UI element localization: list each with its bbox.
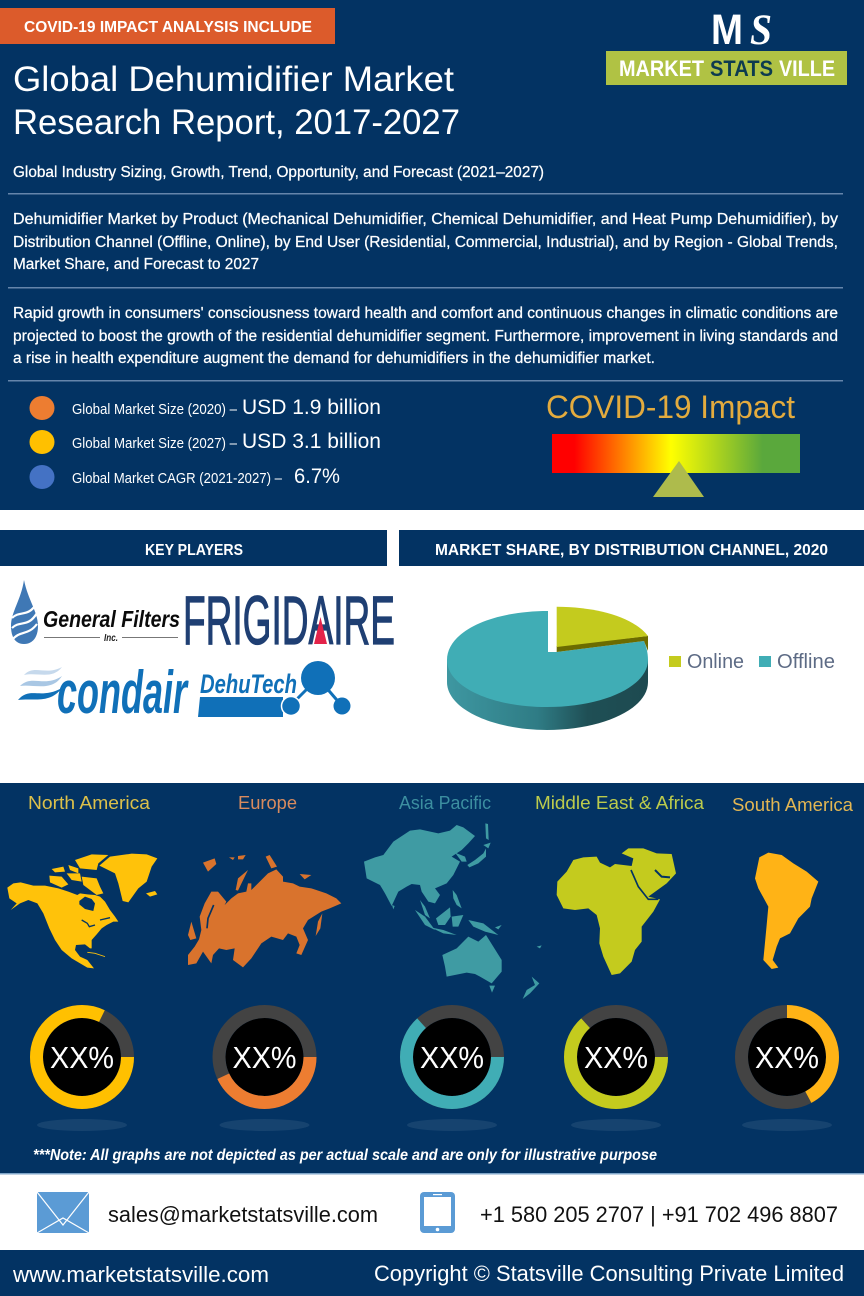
footer: copyright: Copyright © Statsville Consulting Private Limited bbox=[374, 1261, 844, 1286]
donut: North America bbox=[36, 1012, 128, 1131]
stat: market cagr bbox=[30, 465, 340, 489]
donut: Middle East and Africa: XX% bbox=[584, 1040, 648, 1075]
icon: email envelope bbox=[37, 1192, 89, 1233]
donut: North America: XX% bbox=[50, 1040, 114, 1075]
map: Europe bbox=[188, 855, 341, 967]
logo: Condair: condair bbox=[57, 659, 189, 726]
footer: website: www.marketstatsville.com bbox=[12, 1262, 269, 1287]
logo: Market Stats Ville: M bbox=[711, 6, 743, 54]
title bbox=[13, 60, 460, 142]
logo: Market Stats Ville: STATS bbox=[710, 56, 773, 81]
donut: Asia Pacific bbox=[406, 1012, 498, 1131]
label: Europe: Europe bbox=[238, 792, 297, 813]
donut: Asia Pacific: XX% bbox=[420, 1040, 484, 1075]
contact: phone numbers: +1 580 205 2707 | +91 702 496 8807 bbox=[480, 1202, 838, 1227]
contact: email: sales@marketstatsville.com bbox=[108, 1202, 378, 1227]
footnote: ***Note: All graphs are not depicted as per actual scale and are only for illustrative purpose bbox=[33, 1147, 657, 1164]
icon: phone bbox=[420, 1192, 455, 1233]
stat: market size 2027: Global Market Size (2027) – bbox=[72, 435, 238, 452]
donut: South America bbox=[742, 1012, 832, 1131]
subtitle: Global Industry Sizing, Growth, Trend, Opportunity, and Forecast (2021–2027) bbox=[13, 164, 544, 181]
stat: market size 2020 bbox=[30, 396, 381, 420]
text block: market drivers: projected to boost the growth of the residential dehumidifier segment. Furthermore, improvement in living standards and bbox=[13, 328, 838, 345]
stat: market size 2027: USD 3.1 billion bbox=[242, 430, 381, 453]
map: Asia Pacific bbox=[364, 823, 542, 999]
stat: market size 2020: Global Market Size (2020) – bbox=[72, 401, 238, 418]
badge: covid-19 impact analysis bbox=[0, 8, 335, 44]
text block: market segmentation: Dehumidifier Market by Product (Mechanical Dehumidifier, Chemical Dehumidifier, and Heat Pump Dehumidifier), by bbox=[13, 211, 838, 228]
header: key players: KEY PLAYERS bbox=[145, 542, 243, 559]
header: market share: MARKET SHARE, BY DISTRIBUTION CHANNEL, 2020 bbox=[435, 542, 828, 559]
logo: Market Stats Ville: VILLE bbox=[779, 56, 835, 81]
donut: South America: XX% bbox=[755, 1040, 819, 1075]
text block: market drivers: a rise in health expenditure augment the demand for dehumidifiers in the dehumidifier market. bbox=[13, 350, 655, 367]
map: South America bbox=[755, 853, 818, 969]
stat: market cagr: Global Market CAGR (2021-2027) – bbox=[72, 470, 283, 487]
stat: market size 2020: USD 1.9 billion bbox=[242, 396, 381, 419]
logo: Market Stats Ville: MARKET bbox=[619, 56, 705, 81]
heading: covid-19 impact: COVID-19 Impact bbox=[546, 389, 795, 425]
logo: Market Stats Ville: S bbox=[750, 7, 772, 54]
donut: Middle East and Africa bbox=[570, 1012, 662, 1131]
label: South America: South America bbox=[732, 794, 854, 815]
title: Global Dehumidifier Market bbox=[13, 60, 454, 99]
donut: Europe: XX% bbox=[232, 1040, 296, 1075]
logo: General Filters: General Filters bbox=[43, 606, 180, 632]
pie slice: online bbox=[557, 607, 648, 652]
label: Asia Pacific: Asia Pacific bbox=[399, 792, 491, 813]
header: key players bbox=[0, 530, 387, 566]
legend: offline: Offline bbox=[777, 651, 835, 673]
text block: market segmentation: Market Share, and Forecast to 2027 bbox=[13, 256, 259, 273]
header: market share bbox=[399, 530, 864, 566]
label: Middle East and Africa: Middle East & Africa bbox=[535, 792, 705, 813]
title: Research Report, 2017-2027 bbox=[13, 103, 460, 142]
logo: General Filters: Inc. bbox=[104, 633, 118, 644]
label: North America: North America bbox=[28, 792, 151, 813]
map: Middle East and Africa bbox=[557, 848, 676, 975]
stat: market cagr: 6.7% bbox=[294, 465, 340, 488]
logo: DehuTech bbox=[198, 661, 350, 717]
pie slice: offline bbox=[447, 611, 648, 707]
text block: market drivers bbox=[13, 305, 838, 367]
text block: market segmentation bbox=[13, 211, 838, 273]
logo: Frigidaire bbox=[183, 582, 395, 659]
badge: covid-19 impact analysis: COVID-19 IMPACT ANALYSIS INCLUDE bbox=[24, 19, 312, 36]
logo: Market Stats Ville bbox=[606, 6, 847, 85]
logo: DehuTech: DehuTech bbox=[200, 669, 297, 699]
gauge: covid-19 impact bbox=[552, 434, 800, 497]
pie chart: distribution channel bbox=[447, 607, 648, 730]
legend: online: Online bbox=[687, 651, 744, 673]
stat: market size 2027 bbox=[30, 430, 381, 454]
map: North America bbox=[7, 854, 157, 968]
donut: Europe bbox=[219, 1012, 310, 1131]
logo: Frigidaire: FRIGIDAIRE bbox=[183, 582, 395, 659]
text block: market drivers: Rapid growth in consumers' consciousness toward health and comfort and continuous changes in climatic conditions are bbox=[13, 305, 838, 322]
logo: General Filters bbox=[11, 580, 180, 644]
text block: market segmentation: Distribution Channel (Offline, Online), by End User (Residential, Commercial, Industrial), and by Region - Global Trends, bbox=[13, 234, 838, 251]
logo: Condair bbox=[18, 659, 189, 726]
